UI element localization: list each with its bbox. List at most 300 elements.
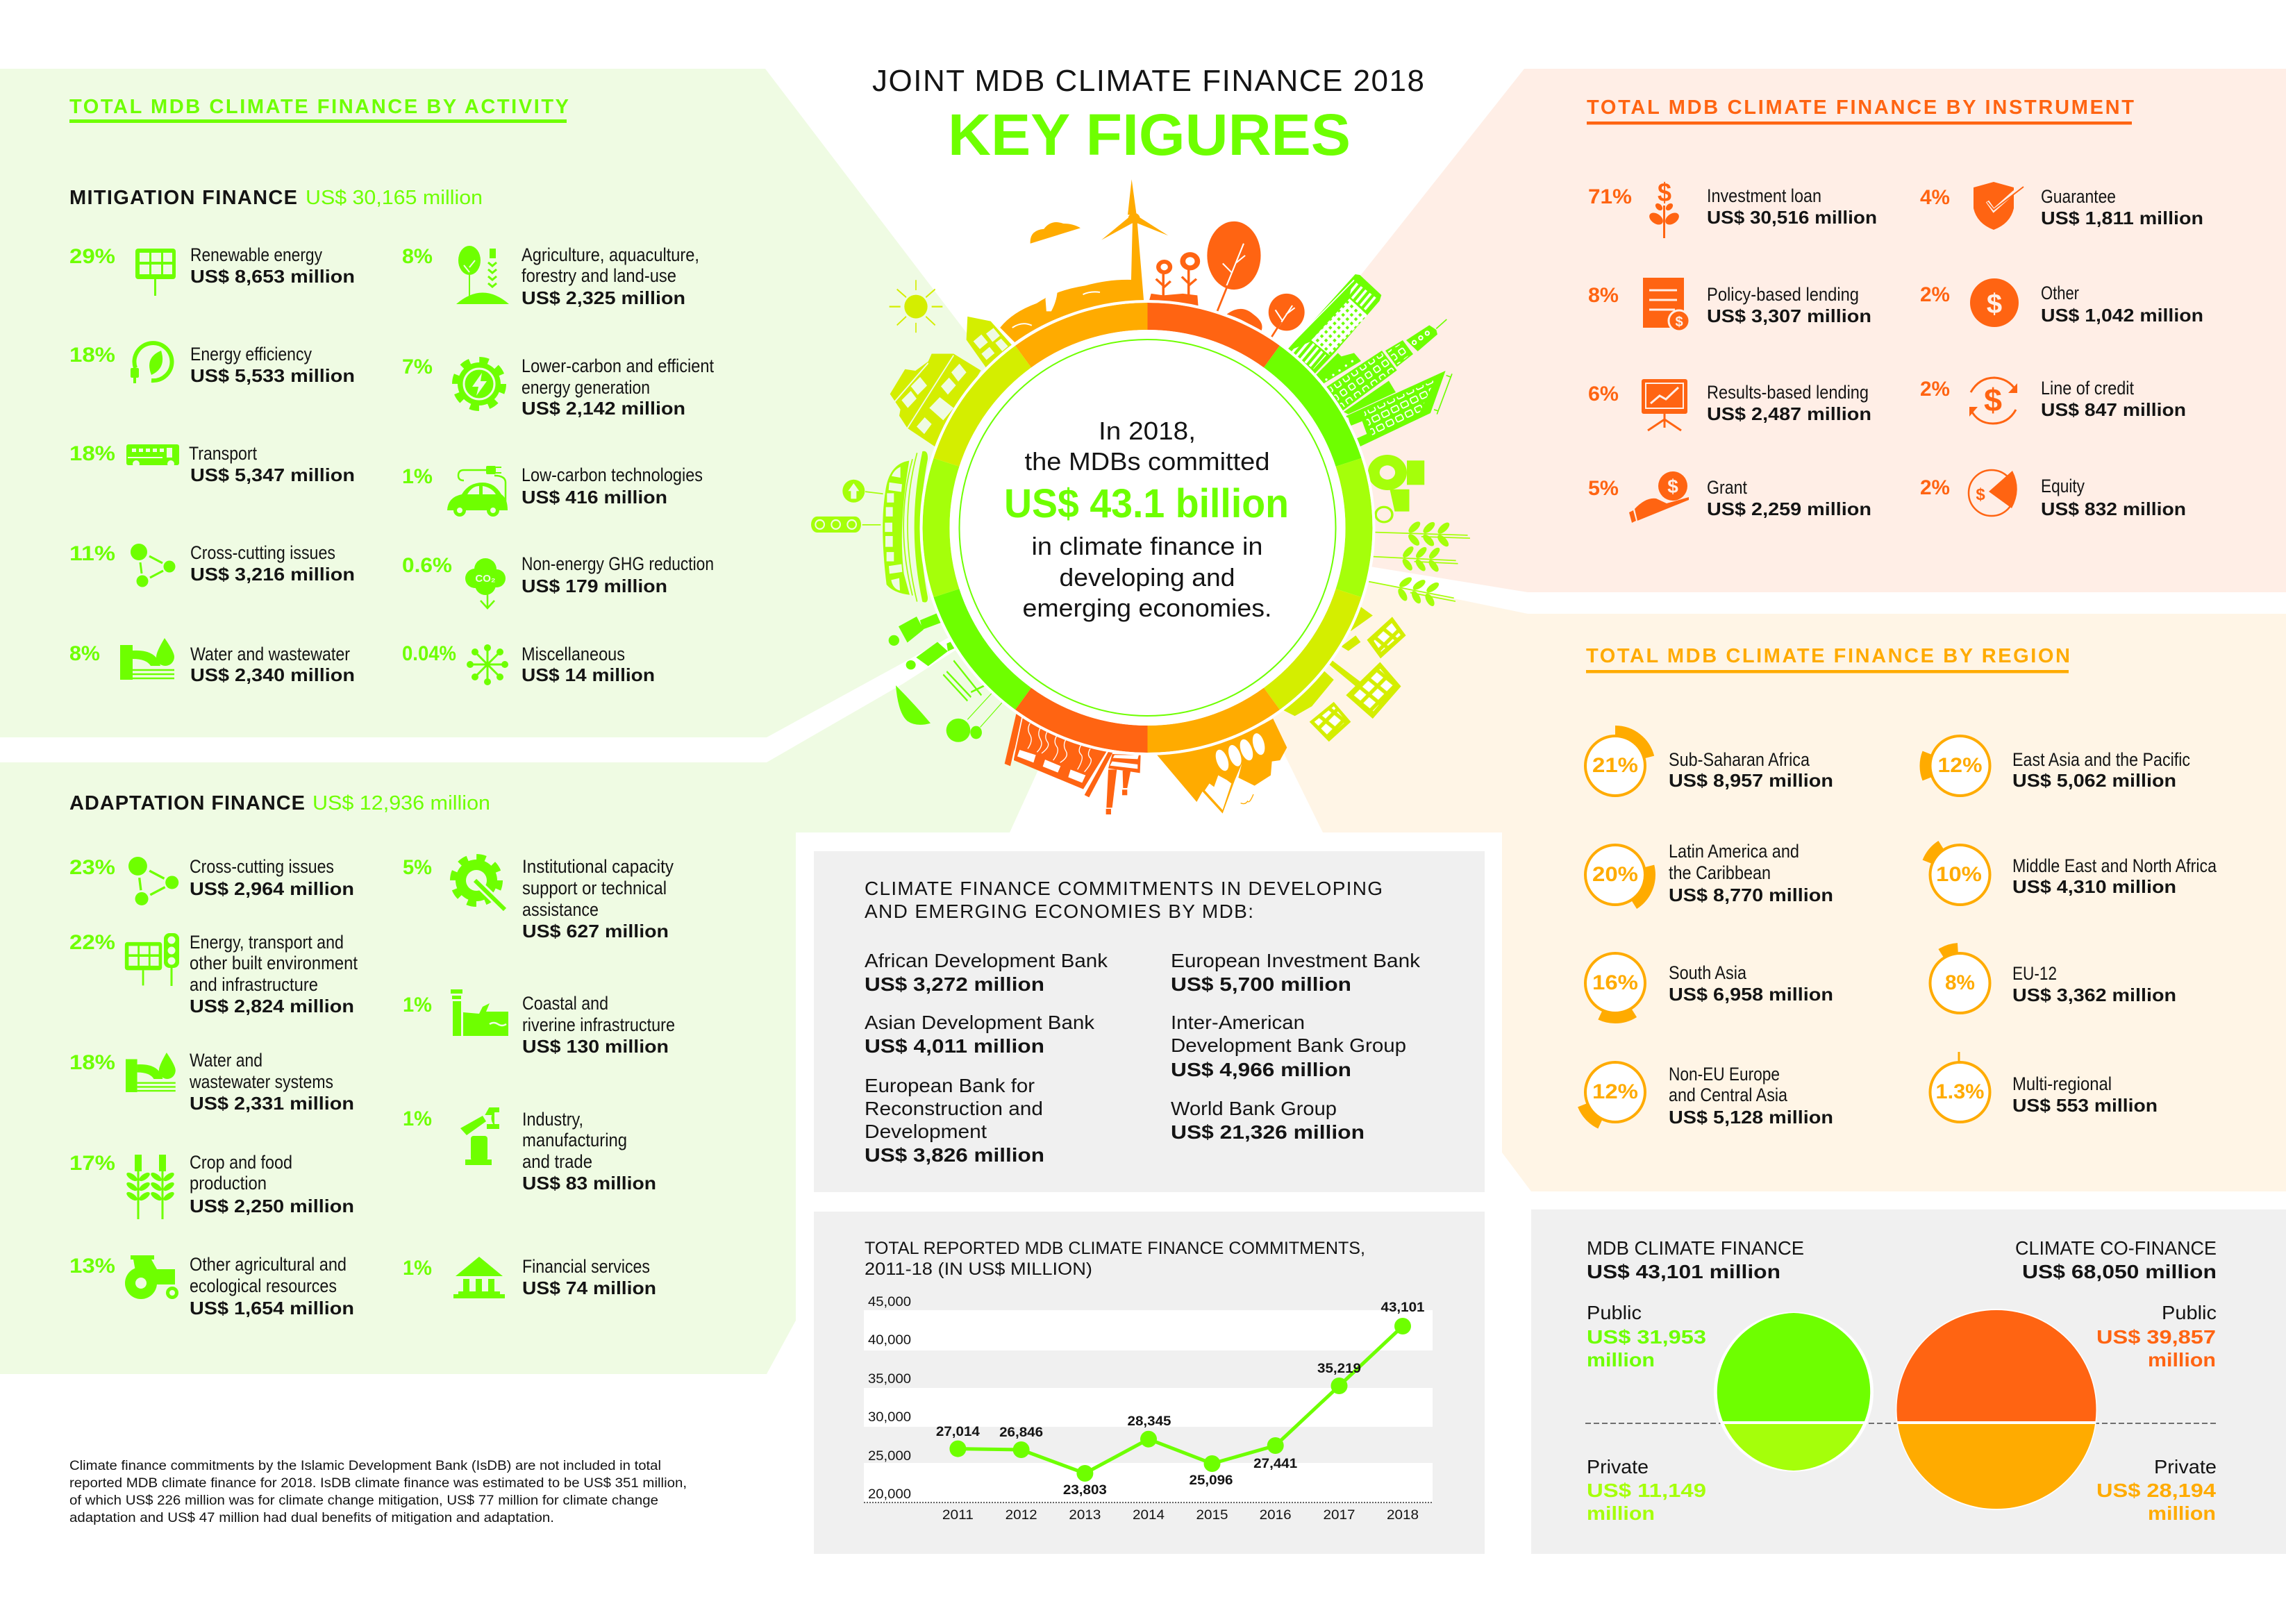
icon: network nodes: [131, 544, 175, 587]
co-finance private: million: [2148, 1502, 2216, 1524]
item: grant: US$ 2,259 million: [1707, 499, 1871, 519]
Asian Development Bank: [865, 1012, 1095, 1057]
icon: water pipe and drop: [120, 638, 174, 680]
item: renewable energy: [69, 244, 355, 296]
item: other agricultural: ecological resources: [190, 1275, 337, 1296]
item: low-carbon technologies: 1%: [402, 465, 433, 488]
item: energy transport infrastructure: [69, 931, 358, 1016]
y axis labels: 20,000: [868, 1487, 911, 1502]
donut: 8%: 8%: [1945, 971, 1975, 994]
item: lower-carbon energy: Lower-carbon and efficient: [522, 355, 714, 376]
item: other: 2%: [1920, 283, 1950, 306]
item: energy efficiency: 18%: [69, 344, 115, 367]
co-finance public: million: [2148, 1349, 2216, 1371]
item: lower-carbon energy: US$ 2,142 million: [522, 398, 685, 419]
illustration: farmland and wind turbine: [1000, 179, 1168, 342]
icon: tree and crop on hill: [456, 246, 509, 304]
donut: 8%: [1925, 948, 1995, 1018]
item: equity: [1920, 470, 2186, 519]
item: energy efficiency: [69, 343, 355, 386]
item: policy-based lending: Policy-based lending: [1707, 284, 1859, 305]
item: cross-cutting issues: [69, 542, 355, 587]
panel: commitments by MDB: [814, 851, 1485, 1192]
item: cross-cutting issues: [69, 856, 354, 905]
EBRD: European Bank for: [865, 1075, 1035, 1096]
item: crop and food: US$ 2,250 million: [190, 1196, 354, 1216]
icon: robot arm: [460, 1108, 499, 1165]
x axis years: 2017: [1324, 1508, 1355, 1523]
footnote: [69, 1459, 687, 1525]
icon: circular arrows and dollar: [1969, 378, 2017, 424]
y axis labels: [868, 1295, 911, 1502]
item: low-carbon technologies: Low-carbon technologies: [522, 464, 703, 485]
item: grant: 5%: [1588, 477, 1619, 500]
item: crop and food: production: [190, 1173, 267, 1194]
EBRD: US$ 3,826 million: [865, 1144, 1044, 1166]
item: line of credit: US$ 847 million: [2041, 399, 2186, 420]
item: energy efficiency: US$ 5,533 million: [190, 365, 355, 386]
item: industry: US$ 83 million: [522, 1173, 656, 1194]
x axis years: 2011: [942, 1508, 974, 1523]
item: Multi-regional: [1930, 1052, 2158, 1122]
item: miscellaneous: [402, 642, 655, 685]
x axis years: 2014: [1133, 1508, 1165, 1523]
item: guarantee: Guarantee: [2041, 186, 2116, 207]
item: other agricultural: [69, 1254, 354, 1319]
icon: coast and water: [451, 989, 508, 1036]
item: other: Other: [2041, 283, 2079, 303]
y axis labels: 40,000: [868, 1333, 911, 1348]
x axis years: 2016: [1260, 1508, 1292, 1523]
item: policy-based lending: 8%: [1588, 284, 1619, 307]
MDB private: [1587, 1456, 1706, 1524]
item: agriculture: 8%: [402, 245, 433, 268]
item: water and wastewater: [69, 638, 355, 685]
item: investment loan: Investment loan: [1707, 185, 1821, 206]
icon: dollar plant: [1647, 178, 1681, 238]
item: industry: [403, 1107, 656, 1194]
item: miscellaneous: US$ 14 million: [522, 664, 655, 685]
donut: 1.3%: [1930, 1052, 1990, 1122]
item: institutional capacity: assistance: [522, 899, 599, 920]
icon: wheat stalks: [125, 1155, 176, 1219]
title: [872, 64, 1424, 167]
item: Middle East: [1925, 840, 2217, 910]
icon: leaf and plug: [131, 343, 172, 383]
item: cross-cutting issues: 11%: [69, 542, 115, 565]
item: South Asia: [1580, 948, 1833, 1018]
MDB public: Public: [1587, 1302, 1642, 1323]
icon: bank building: [453, 1257, 505, 1298]
donut: 12%: 12%: [1937, 754, 1982, 777]
Inter-American Development Bank Group: US$ 4,966 million: [1171, 1059, 1351, 1080]
MDB public: [1587, 1302, 1706, 1371]
chart: climate co-finance split: [1896, 1309, 2097, 1510]
panel: activity adaptation background: [0, 528, 1147, 1374]
center statement: [1004, 417, 1289, 622]
illustration: mountains and orchard: [1156, 719, 1287, 814]
item: Latin America: US$ 8,770 million: [1669, 885, 1833, 905]
white frame behind MDB panel: [796, 832, 1502, 1624]
item: East Asia: [1925, 730, 2190, 801]
item: low-carbon technologies: US$ 416 million: [522, 487, 667, 508]
icon: dollar coin: $: [1987, 289, 2002, 319]
center statement: developing and: [1060, 563, 1235, 592]
panel: line chart: TOTAL REPORTED MDB CLIMATE FINANCE COMMITMENTS,: [865, 1239, 1365, 1258]
item: coastal infrastructure: riverine infrastructure: [522, 1014, 675, 1035]
item: Non-EU Europe: Non-EU Europe: [1669, 1064, 1780, 1085]
item: water systems: Water and: [190, 1050, 262, 1071]
item: Latin America: [1580, 840, 1833, 910]
item: Sub-Saharan Africa: Sub-Saharan Africa: [1669, 749, 1810, 770]
item: financial services: 1%: [403, 1257, 432, 1280]
item: Non-EU Europe: US$ 5,128 million: [1669, 1107, 1833, 1128]
item: Middle East: US$ 4,310 million: [2012, 876, 2176, 897]
data values: 43,101: [1380, 1300, 1425, 1315]
item: other agricultural: Other agricultural and: [190, 1254, 347, 1275]
heading: adaptation finance: US$ 12,936 million: [312, 792, 490, 814]
chart: MDB climate finance split: [1714, 1312, 1874, 1472]
item: Non-EU Europe: and Central Asia: [1669, 1085, 1788, 1105]
African Development Bank: African Development Bank: [865, 950, 1108, 971]
item: cross-cutting issues: Cross-cutting issues: [190, 856, 334, 877]
item: results-based lending: Results-based lending: [1707, 382, 1869, 403]
icon: hand with coin: $: [1667, 476, 1678, 497]
data values: 35,219: [1317, 1362, 1361, 1376]
co-finance public: US$ 39,857: [2096, 1326, 2216, 1348]
item: agriculture: [402, 244, 699, 308]
center statement: in climate finance in: [1032, 532, 1262, 560]
MDB climate finance totals: MDB CLIMATE FINANCE: [1587, 1237, 1804, 1259]
heading: by activity: TOTAL MDB CLIMATE FINANCE BY ACTIVITY: [69, 96, 569, 118]
item: institutional capacity: [403, 856, 674, 941]
item: Non-EU Europe: [1580, 1057, 1833, 1128]
item: investment loan: 71%: [1588, 185, 1632, 208]
y axis labels: 30,000: [868, 1410, 911, 1425]
Inter-American Development Bank Group: Inter-American: [1171, 1012, 1305, 1033]
icon: dollar coin: [1970, 278, 2019, 327]
item: Latin America: the Caribbean: [1669, 862, 1771, 883]
item: non-energy GHG reduction: Non-energy GHG reduction: [522, 553, 714, 574]
y axis labels: 25,000: [868, 1449, 911, 1464]
panel: commitments by MDB: CLIMATE FINANCE COMMITMENTS IN DEVELOPING: [865, 878, 1383, 899]
data values: 23,803: [1063, 1483, 1107, 1498]
x axis years: 2012: [1006, 1508, 1037, 1523]
Inter-American Development Bank Group: Development Bank Group: [1171, 1035, 1406, 1056]
illustration: red flowers and trees: [1149, 221, 1305, 339]
African Development Bank: US$ 3,272 million: [865, 973, 1044, 995]
donut: 1.3%: 1.3%: [1936, 1080, 1985, 1103]
item: coastal infrastructure: Coastal and: [522, 993, 608, 1014]
item: policy-based lending: US$ 3,307 million: [1707, 305, 1871, 326]
illustration: solar panels: [1283, 607, 1406, 742]
item: energy transport infrastructure: US$ 2,824 million: [190, 996, 354, 1016]
item: lower-carbon energy: [402, 355, 714, 419]
x axis years: 2013: [1069, 1508, 1101, 1523]
panel: public and private finance: [1531, 1209, 2286, 1554]
item: water and wastewater: 8%: [69, 642, 100, 665]
item: Middle East: Middle East and North Africa: [2012, 855, 2217, 876]
title: KEY FIGURES: [948, 102, 1351, 167]
heading: adaptation finance: ADAPTATION FINANCE: [69, 792, 305, 814]
climate co-finance totals: US$ 68,050 million: [2022, 1261, 2217, 1282]
MDB public: US$ 31,953: [1587, 1326, 1706, 1348]
item: water and wastewater: Water and wastewater: [190, 644, 350, 664]
x axis years: 2015: [1196, 1508, 1228, 1523]
donut: 20%: [1580, 840, 1650, 910]
icon: presentation chart: [1642, 379, 1687, 430]
item: non-energy GHG reduction: [402, 553, 714, 608]
item: Latin America: Latin America and: [1669, 841, 1799, 862]
item: guarantee: US$ 1,811 million: [2041, 208, 2203, 228]
heading: by instrument: TOTAL MDB CLIMATE FINANCE BY INSTRUMENT: [1587, 97, 2134, 119]
item: financial services: [403, 1256, 656, 1298]
y axis labels: 35,000: [868, 1372, 911, 1387]
panel: line chart: [814, 1212, 1485, 1554]
item: non-energy GHG reduction: US$ 179 million: [522, 576, 667, 596]
item: crop and food: 17%: [69, 1152, 115, 1175]
item: transport: 18%: [69, 442, 115, 465]
item: equity: 2%: [1920, 476, 1950, 499]
illustration: world ring: [811, 179, 1471, 814]
footnote: adaptation and US$ 47 million had dual benefits of mitigation and adaptation.: [69, 1511, 554, 1525]
center statement: emerging economies.: [1022, 594, 1272, 622]
panel: line chart: 2011-18 (IN US$ MILLION): [865, 1259, 1092, 1279]
co-finance public: [2096, 1302, 2217, 1371]
MDB public: million: [1587, 1349, 1655, 1371]
item: East Asia: US$ 5,062 million: [2012, 770, 2176, 791]
donut: 21%: [1580, 730, 1650, 801]
heading: mitigation finance: [69, 187, 483, 209]
panel: region background: [1147, 528, 2286, 1191]
item: East Asia: East Asia and the Pacific: [2012, 749, 2190, 770]
item: energy transport infrastructure: 22%: [69, 931, 115, 954]
donut: 16%: 16%: [1592, 971, 1638, 994]
illustration: figures and trees: [889, 612, 1002, 742]
item: coastal infrastructure: 1%: [403, 994, 432, 1016]
item: Multi-regional: Multi-regional: [2012, 1073, 2112, 1094]
item: EU-12: US$ 3,362 million: [2012, 985, 2176, 1005]
y axis labels: 45,000: [868, 1295, 911, 1309]
panel: instrument background: [1147, 69, 2286, 592]
title: JOINT MDB CLIMATE FINANCE 2018: [872, 64, 1424, 98]
item: transport: US$ 5,347 million: [190, 464, 355, 485]
item: energy transport infrastructure: and infrastructure: [190, 974, 318, 995]
item: results-based lending: US$ 2,487 million: [1707, 403, 1871, 424]
icon: document with coin: [1643, 278, 1690, 331]
footnote: of which US$ 226 million was for climate change mitigation, US$ 77 million for climate change: [69, 1493, 658, 1508]
item: other agricultural: US$ 1,654 million: [190, 1298, 354, 1319]
co-finance public: Public: [2162, 1302, 2217, 1323]
World Bank Group: US$ 21,326 million: [1171, 1121, 1365, 1143]
donut ring: [921, 301, 1374, 754]
co-finance private: Private: [2154, 1456, 2217, 1477]
item: energy transport infrastructure: Energy, transport and: [190, 932, 344, 953]
item: guarantee: 4%: [1920, 186, 1950, 209]
center statement: In 2018,: [1099, 417, 1196, 445]
icon: CO2 cloud: [465, 558, 506, 608]
icon: network nodes: [128, 857, 178, 905]
center statement: US$ 43.1 billion: [1004, 481, 1289, 526]
footnote: reported MDB climate finance for 2018. IsDB climate finance was estimated to be US$ 351 million,: [69, 1476, 687, 1491]
item: other: US$ 1,042 million: [2041, 305, 2203, 326]
item: institutional capacity: 5%: [403, 856, 432, 879]
donut: 12%: [1925, 730, 1995, 801]
illustration: sun: [890, 280, 942, 333]
item: investment loan: [1588, 178, 1877, 238]
item: EU-12: EU-12: [2012, 963, 2057, 984]
item: institutional capacity: support or technical: [522, 878, 667, 898]
item: industry: Industry,: [522, 1109, 583, 1130]
icon: radial burst: [467, 644, 508, 685]
icon: circular arrows and dollar: $: [1984, 382, 2002, 418]
item: low-carbon technologies: [402, 464, 703, 517]
item: grant: [1588, 471, 1871, 523]
item: guarantee: [1920, 182, 2203, 230]
heading: mitigation finance: US$ 30,165 million: [306, 187, 483, 209]
item: water systems: wastewater systems: [189, 1071, 333, 1092]
center statement: the MDBs committed: [1025, 447, 1269, 476]
item: energy efficiency: Energy efficiency: [190, 344, 312, 365]
icon: electric car: [447, 466, 508, 517]
MDB climate finance totals: US$ 43,101 million: [1587, 1261, 1780, 1282]
item: Multi-regional: US$ 553 million: [2012, 1095, 2158, 1116]
item: coastal infrastructure: US$ 130 million: [522, 1036, 669, 1057]
illustration: factory and paint roller: [1005, 714, 1141, 814]
item: renewable energy: 29%: [69, 245, 115, 268]
item: cross-cutting issues: US$ 3,216 million: [190, 564, 355, 585]
World Bank Group: [1171, 1098, 1365, 1143]
climate co-finance totals: CLIMATE CO-FINANCE: [2015, 1237, 2217, 1259]
icon: water pipe and drop: [126, 1053, 176, 1092]
item: grant: Grant: [1707, 477, 1747, 498]
data line: [949, 1318, 1411, 1482]
icon: document with coin: $: [1675, 315, 1683, 330]
x axis years: 2018: [1387, 1508, 1419, 1523]
icon: tractor: [125, 1255, 178, 1299]
item: water systems: [69, 1050, 354, 1114]
item: agriculture: US$ 2,325 million: [522, 287, 685, 308]
item: policy-based lending: [1588, 278, 1871, 331]
item: institutional capacity: Institutional capacity: [522, 856, 674, 877]
heading: adaptation finance: [69, 792, 490, 814]
icon: gear with lightning bolt: [456, 360, 503, 408]
heading: mitigation finance: MITIGATION FINANCE: [69, 187, 297, 209]
item: crop and food: [69, 1152, 354, 1219]
MDB private: US$ 11,149: [1587, 1480, 1706, 1501]
climate co-finance totals: [2015, 1237, 2217, 1282]
item: non-energy GHG reduction: 0.6%: [402, 554, 452, 577]
item: water systems: US$ 2,331 million: [190, 1093, 354, 1114]
item: industry: 1%: [403, 1107, 432, 1130]
panel: commitments by MDB: AND EMERGING ECONOMIES BY MDB:: [865, 901, 1253, 922]
illustration: left side scenery: [811, 280, 1012, 742]
item: results-based lending: [1588, 379, 1871, 430]
item: institutional capacity: US$ 627 million: [522, 921, 669, 941]
data values: 25,096: [1189, 1473, 1233, 1488]
illustration: house and building: [890, 317, 1012, 446]
MDB private: million: [1587, 1502, 1655, 1524]
item: cross-cutting issues: US$ 2,964 million: [190, 878, 354, 899]
MDB climate finance totals: [1587, 1237, 1804, 1282]
Asian Development Bank: US$ 4,011 million: [865, 1035, 1044, 1057]
item: other: [1920, 278, 2203, 327]
donut: 21%: 21%: [1592, 754, 1638, 777]
x axis years: [942, 1508, 1419, 1523]
item: renewable energy: Renewable energy: [190, 244, 322, 265]
illustration: boat and signals: [811, 451, 928, 602]
donut: 12%: [1580, 1057, 1650, 1128]
item: equity: Equity: [2041, 476, 2085, 496]
item: other agricultural: 13%: [69, 1255, 115, 1278]
icon: solar panel and traffic light: [125, 933, 179, 986]
donut: 12%: 12%: [1592, 1080, 1638, 1103]
item: line of credit: Line of credit: [2041, 378, 2134, 399]
icon: pie with dollar: [1969, 470, 2017, 516]
EBRD: Reconstruction and: [865, 1098, 1043, 1119]
item: water and wastewater: US$ 2,340 million: [190, 664, 355, 685]
item: line of credit: 2%: [1920, 378, 1950, 401]
item: lower-carbon energy: 7%: [402, 355, 433, 378]
African Development Bank: [865, 950, 1108, 995]
item: investment loan: US$ 30,516 million: [1707, 207, 1877, 228]
illustration: top, right and lower right scenery: [1000, 179, 1471, 742]
Asian Development Bank: Asian Development Bank: [865, 1012, 1095, 1033]
item: South Asia: South Asia: [1669, 962, 1747, 983]
data values: 28,345: [1128, 1414, 1171, 1429]
item: financial services: US$ 74 million: [522, 1278, 656, 1298]
item: lower-carbon energy: energy generation: [522, 377, 650, 398]
item: renewable energy: US$ 8,653 million: [190, 266, 355, 287]
MDB private: Private: [1587, 1456, 1649, 1477]
illustration: tractor and wheat: [1365, 455, 1471, 612]
icon: CO2 cloud: CO₂: [475, 573, 496, 585]
World Bank Group: World Bank Group: [1171, 1098, 1337, 1119]
item: water systems: 18%: [69, 1051, 115, 1074]
item: industry: manufacturing: [522, 1130, 627, 1150]
item: industry: and trade: [522, 1151, 592, 1172]
item: transport: [69, 442, 355, 485]
Inter-American Development Bank Group: [1171, 1012, 1406, 1080]
donut: 10%: 10%: [1936, 863, 1982, 886]
co-finance private: [2096, 1456, 2217, 1524]
donut: 16%: [1580, 948, 1650, 1018]
illustration: green city: [1287, 274, 1452, 446]
data values: 27,014: [936, 1425, 980, 1439]
panel: activity mitigation background: [0, 69, 1147, 737]
item: South Asia: US$ 6,958 million: [1669, 984, 1833, 1005]
item: miscellaneous: Miscellaneous: [522, 644, 625, 664]
item: agriculture: forestry and land-use: [522, 265, 676, 286]
EBRD: [865, 1075, 1044, 1166]
icon: bus: [126, 444, 179, 467]
item: energy transport infrastructure: other built environment: [190, 953, 358, 973]
item: coastal infrastructure: [403, 989, 675, 1057]
item: transport: Transport: [189, 443, 257, 464]
item: cross-cutting issues: Cross-cutting issues: [190, 542, 335, 563]
item: line of credit: [1920, 378, 2186, 424]
item: equity: US$ 832 million: [2041, 499, 2186, 519]
donut: 20%: 20%: [1592, 863, 1638, 886]
item: miscellaneous: 0.04%: [402, 642, 456, 665]
icon: dollar plant: $: [1658, 178, 1671, 208]
item: Sub-Saharan Africa: US$ 8,957 million: [1669, 770, 1833, 791]
item: crop and food: Crop and food: [190, 1152, 292, 1173]
footnote: Climate finance commitments by the Islamic Development Bank (IsDB) are not included in total: [69, 1459, 661, 1473]
data values: 27,441: [1253, 1457, 1298, 1471]
European Investment Bank: [1171, 950, 1421, 995]
EBRD: Development: [865, 1121, 987, 1142]
